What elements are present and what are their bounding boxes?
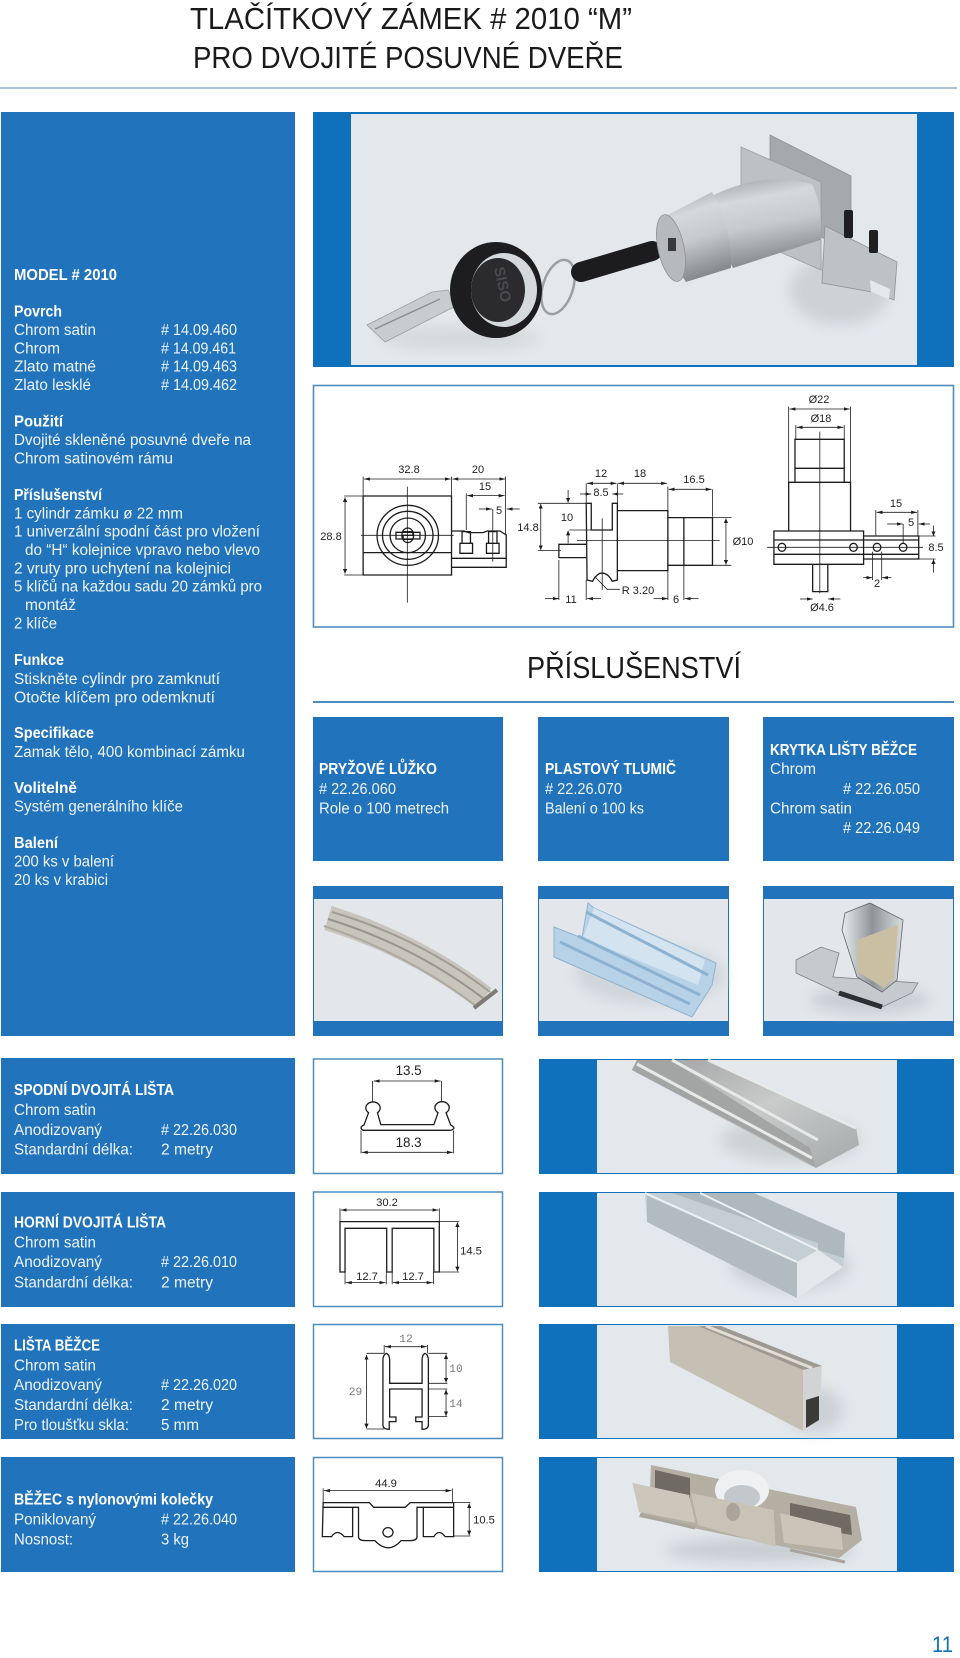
chart: dimension labels: 11 [565,594,577,606]
text block: use: Chrom satinovém rámu [14,450,173,467]
panel: rubber bed text: Role o 100 metrech [319,801,449,818]
panel: runner drawing: 10.5 [473,1514,495,1526]
panel: plastic damper text: PLASTOVÝ TLUMIČ [545,760,676,778]
chart: dimension labels: Ø10 [733,536,753,548]
panel: runner rail cover text: # 22.26.050 [843,781,920,798]
panel: bottom rail drawing: 18.3 [396,1135,422,1150]
chart: dimension labels: 2 [874,578,880,590]
text block: surface finishes: # 14.09.462 [161,377,237,394]
panel: runner rail text: Standardní délka: [14,1397,133,1414]
panel: bottom double rail text: Chrom satin [14,1102,96,1119]
panel: runner rail text: LIŠTA BĚŽCE [14,1337,100,1355]
text block: accessories included: 2 klíče [14,615,57,632]
title: PRO DVOJITÉ POSUVNÉ DVEŘE [193,40,623,75]
chart: dimension labels: 14.8 [517,522,539,534]
panel: plastic damper text [538,717,729,861]
chart: top rail profile [340,1208,459,1284]
panel: bottom rail drawing [314,1059,502,1174]
panel: rubber bed text: PRYŽOVÉ LŮŽKO [319,759,437,778]
text block: surface finishes: Zlato matné [14,359,96,376]
panel: runner drawing: 44.9 [375,1478,397,1490]
text block: surface finishes: Chrom satin [14,322,96,339]
chart: dimension labels: 10 [561,512,573,524]
chart: dimension labels: 18 [634,468,646,480]
chart: dimension labels: 16.5 [683,474,705,486]
panel: runner rail text: 5 mm [161,1417,199,1434]
panel: top double rail text [1,1192,295,1307]
panel: runner rail drawing: 12 [399,1334,413,1346]
panel: top double rail text: Anodizovaný [14,1254,102,1271]
chart: dimension labels [320,394,944,614]
text block: surface finishes: # 14.09.460 [161,322,237,339]
chart: dimension labels: Ø18 [811,413,831,425]
panel: lock photo [313,112,954,367]
panel: runner rail text: 2 metry [161,1397,213,1414]
panel: top double rail text: Chrom satin [14,1234,96,1251]
text block: use [14,414,251,467]
chart: dimension labels: 32.8 [398,464,420,476]
panel: plastic damper text: Balení o 100 ks [545,801,644,818]
panel: bottom double rail text: # 22.26.030 [161,1122,237,1139]
icon: top rail [645,1193,850,1298]
panel: runner rail drawing: 10 [449,1364,463,1376]
text block: function: Funkce [14,652,64,669]
text block: accessories included: 2 vruty pro uchytení na kolejnici [14,560,231,577]
icon: blue damper [554,903,725,1017]
panel: top double rail text: HORNÍ DVOJITÁ LIŠTA [14,1214,166,1232]
chart: dimension labels: 28.8 [320,531,342,543]
chart: dimension labels: 8.5 [928,542,944,554]
text block: packaging: 20 ks v krabici [14,872,108,889]
panel: top rail drawing: 12.7 [356,1271,378,1283]
chart: dimension lines [344,407,936,603]
panel: runner rail cover text: # 22.26.049 [843,820,920,837]
panel: top double rail text: Standardní délka: [14,1274,133,1291]
panel: top rail drawing: 30.2 [376,1197,398,1209]
title [190,1,632,75]
text block: use: Dvojité skleněné posuvné dveře na [14,432,251,449]
panel: runner rail text: Pro tloušťku skla: [14,1417,129,1434]
panel: top rail photo [539,1192,954,1307]
text block: packaging: 200 ks v balení [14,854,115,871]
chart: H profile [367,1345,447,1429]
panel: runner rail text: Chrom satin [14,1357,96,1374]
text block: surface finishes: # 14.09.461 [161,340,236,357]
text block: function: Stiskněte cylindr pro zamknutí [14,671,221,688]
icon: lock cylinder [651,135,897,300]
chart: dimension labels: 5 [496,505,502,517]
panel: runner rail cover text: Chrom [770,761,816,778]
panel: runner photo [539,1457,954,1572]
panel: runner with nylon wheels text: BĚŽEC s nylonovými kolečky [14,1490,213,1508]
icon: runner rail [668,1326,843,1432]
text block: accessories included: montáž [25,597,76,614]
panel: runner rail cover text [763,717,954,861]
chart: dimension labels: 12 [595,468,607,480]
text block: function [14,652,221,706]
icon: rubber strip [324,912,497,1008]
text block: optional [14,780,183,816]
chart: dimension labels: 8.5 [593,487,609,499]
panel: runner rail text: Anodizovaný [14,1377,102,1394]
panel: lock dimension drawing [314,386,954,627]
text block: function: Otočte klíčem pro odemknutí [14,689,216,706]
chart: bottom rail profile [361,1081,454,1153]
panel: runner rail drawing [314,1324,502,1438]
text block: use: Použití [14,414,64,431]
title: TLAČÍTKOVÝ ZÁMEK # 2010 “M” [190,1,632,36]
panel: runner with nylon wheels text: 3 kg [161,1531,189,1548]
chart: dimension labels: R 3.20 [622,585,654,597]
panel: runner rail text: # 22.26.020 [161,1377,237,1394]
text block: optional: Systém generálního klíče [14,799,183,816]
text block: accessories included: 5 klíčů na každou sadu 20 zámků pro [14,579,262,596]
panel: rubber bed photo [313,886,503,1036]
panel: top rail drawing: 14.5 [460,1246,482,1258]
chart: dimension labels: 20 [472,464,484,476]
chart: dimension labels: 6 [673,594,679,606]
panel: plastic damper photo [538,886,729,1036]
model heading: MODEL # 2010 [14,267,117,284]
panel: rubber bed text [313,717,503,861]
panel: top double rail text: # 22.26.010 [161,1254,237,1271]
page number: 11 [932,1632,953,1657]
icon: bottom rail [632,1060,860,1168]
text block: surface finishes: Chrom [14,340,60,357]
panel: bottom double rail text: 2 metry [161,1142,213,1159]
panel: bottom double rail text: Standardní délka: [14,1142,133,1159]
panel: runner with nylon wheels text [1,1457,295,1572]
chart: dimension labels: 5 [908,517,914,529]
text block: accessories included [14,487,262,632]
icon: key: SISO [490,265,514,304]
text block: specification: Specifikace [14,725,94,742]
panel: runner with nylon wheels text: Nosnost: [14,1531,73,1548]
panel: bottom rail drawing: 13.5 [396,1063,422,1078]
panel: runner rail drawing: 14 [449,1399,463,1411]
panel: bottom double rail text: SPODNÍ DVOJITÁ LIŠTA [14,1081,174,1099]
text block: accessories included: 1 univerzální spodní část pro vložení [14,524,261,541]
panel: runner drawing [314,1458,502,1572]
panel: top double rail text: 2 metry [161,1274,213,1291]
panel: bottom rail photo [539,1059,954,1174]
panel: runner rail drawing: 29 [349,1387,362,1399]
panel: bottom double rail text: Anodizovaný [14,1122,102,1139]
icon: chrome cover [796,903,930,1014]
chart: dimension labels: Ø22 [809,394,829,406]
text block: optional: Volitelně [14,780,77,797]
chart: dimension labels: Ø4.6 [810,602,834,614]
text block: accessories included: Příslušenství [14,487,103,504]
heading: accessories: PŘÍSLUŠENSTVÍ [527,650,741,685]
panel: runner cover photo [763,886,954,1036]
panel: runner rail cover text: KRYTKA LIŠTY BĚŽCE [770,741,917,759]
text block: surface finishes: Povrch [14,304,62,321]
icon: key [367,242,680,350]
panel: product specification [1,112,295,1036]
panel: runner with nylon wheels text: Poniklovaný [14,1512,96,1528]
text block: accessories included: do “H“ kolejnice vpravo nebo vlevo [25,542,260,559]
panel: top rail drawing [314,1192,502,1306]
text block: specification: Zamak tělo, 400 kombinací zámku [14,744,245,761]
text block: surface finishes [14,304,237,394]
panel: runner rail photo [539,1324,954,1439]
chart: dimension labels: 15 [479,481,491,493]
icon: wheel runner [632,1465,862,1562]
panel: runner with nylon wheels text: # 22.26.040 [161,1512,237,1528]
text block: specification [14,725,245,761]
text block: surface finishes: Zlato lesklé [14,377,91,394]
panel: top rail drawing: 12.7 [402,1271,424,1283]
text block: accessories included: 1 cylindr zámku ø 22 mm [14,505,183,522]
text block: packaging [14,835,115,889]
panel: plastic damper text: # 22.26.070 [545,781,622,798]
panel: rubber bed text: # 22.26.060 [319,781,396,798]
shadow under lock [790,255,890,325]
panel: runner rail text [1,1324,295,1439]
chart: dimension labels: 15 [890,498,902,510]
panel: bottom double rail text [1,1058,295,1174]
text block: surface finishes: # 14.09.463 [161,359,237,376]
text block: packaging: Balení [14,835,59,852]
panel: runner rail cover text: Chrom satin [770,801,852,818]
chart: runner profile [322,1488,470,1548]
